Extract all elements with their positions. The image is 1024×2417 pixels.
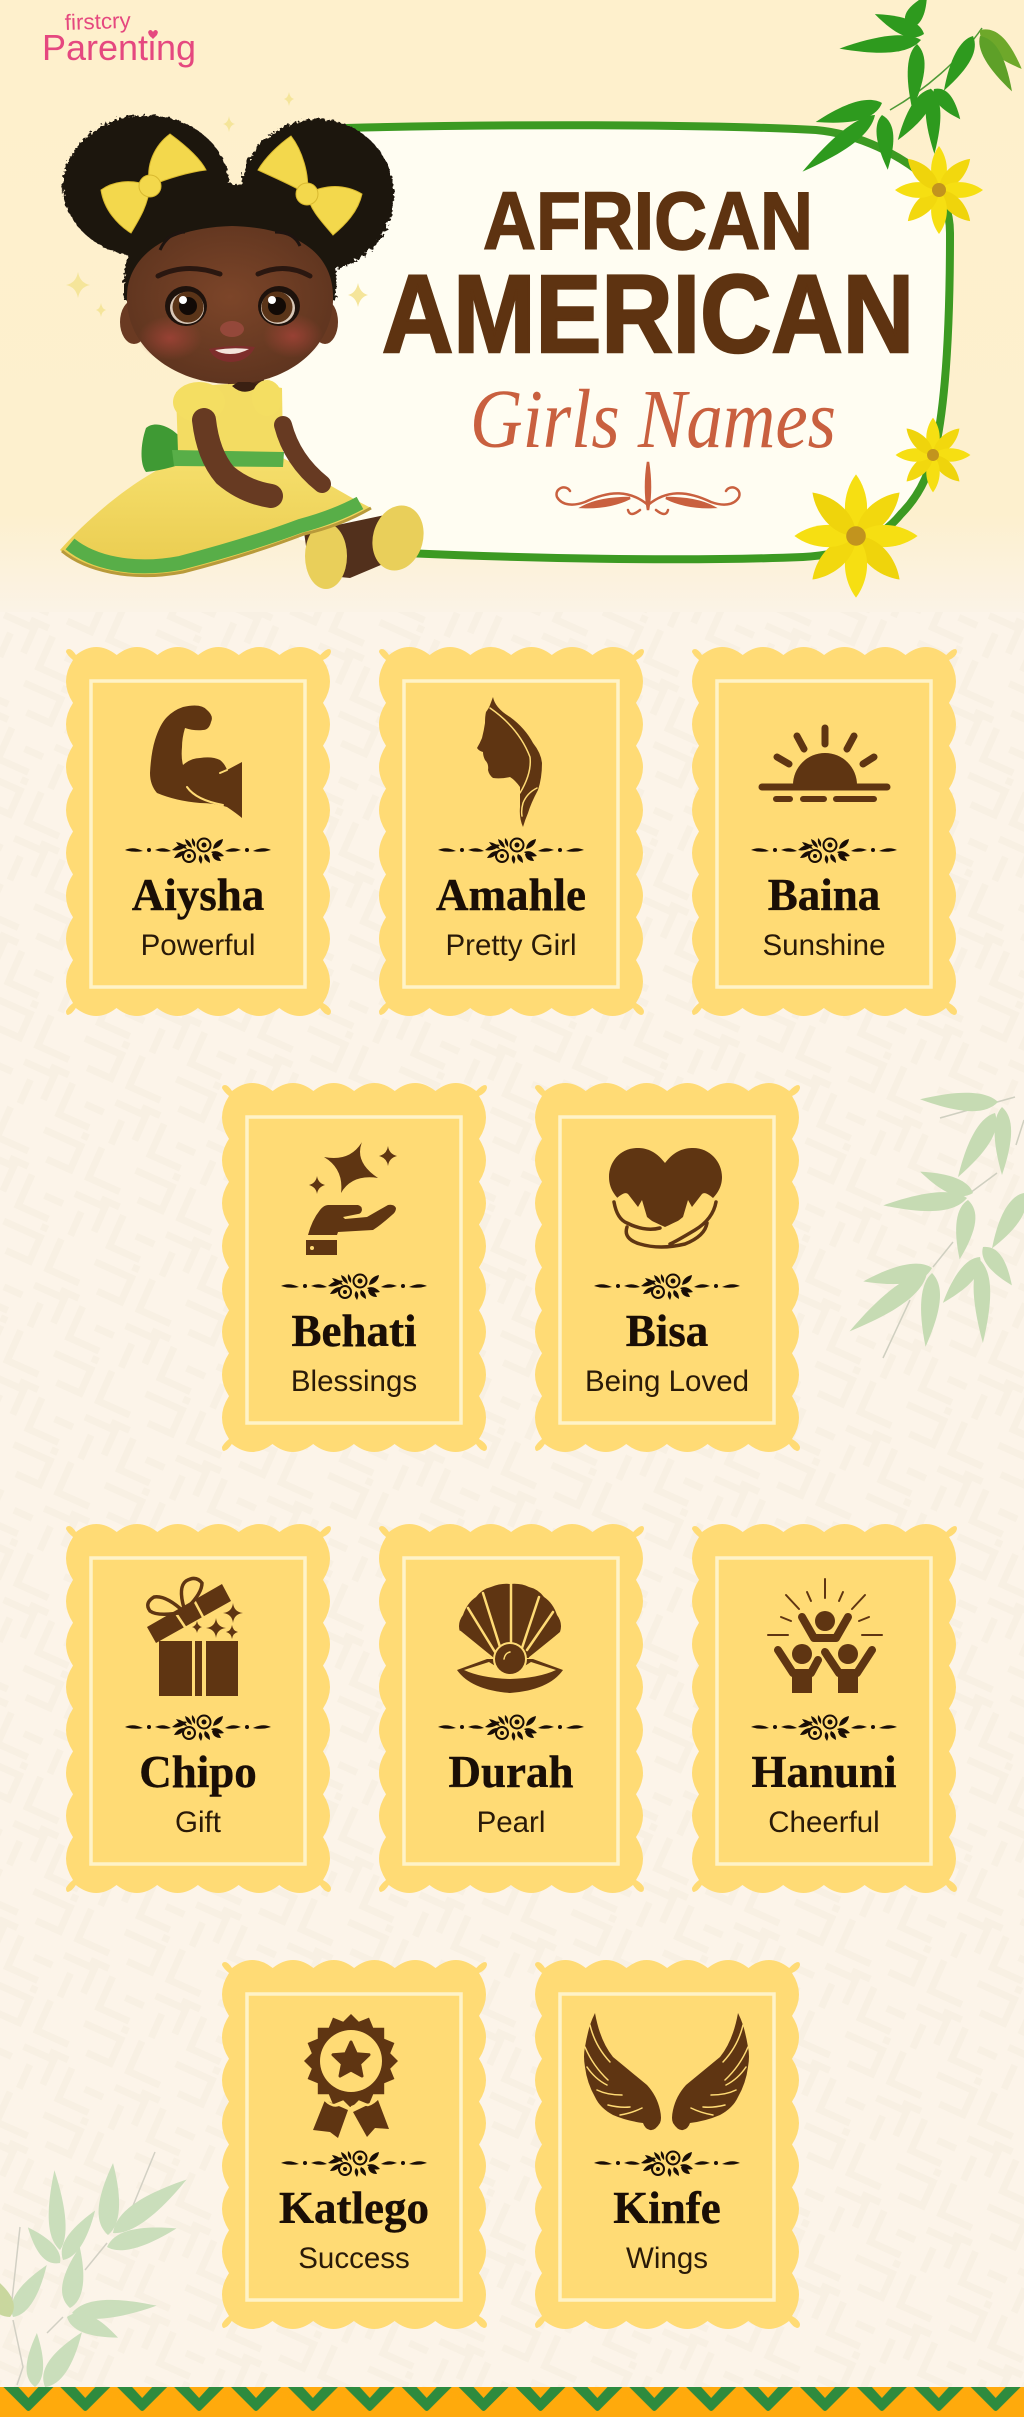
hair puffs: [63, 115, 394, 300]
name: Chipo: [139, 1747, 257, 1797]
name: Katlego: [279, 2183, 429, 2233]
title: Girls Names: Girls Names: [470, 373, 836, 466]
ornament: [281, 1274, 427, 1300]
title: African: AFRICAN: [483, 176, 813, 267]
ornament: [125, 1715, 271, 1741]
meaning: Sunshine: [762, 929, 886, 962]
eyes: [165, 286, 300, 326]
name: Aiysha: [132, 870, 264, 920]
icon: gift box: [147, 1578, 243, 1696]
shoes: [305, 500, 431, 589]
skirt: [60, 458, 371, 576]
skirt trim: [62, 508, 371, 576]
ornament: [751, 838, 897, 864]
bodice: [176, 384, 283, 452]
title frame: [270, 125, 950, 559]
icon: hugged heart: [609, 1148, 722, 1247]
icon: hand with sparkles: [306, 1142, 397, 1255]
bamboo: top right: [798, 0, 1024, 179]
ornament: [594, 2151, 740, 2177]
logo: [42, 8, 196, 68]
meaning: Wings: [626, 2242, 708, 2275]
bows: [101, 134, 362, 235]
card: Baina: [692, 647, 957, 1016]
card: Katlego: [222, 1960, 487, 2329]
sparkles: [66, 92, 368, 317]
flower: middle right: [896, 418, 970, 492]
name: Behati: [291, 1306, 417, 1356]
illustration: girl: [60, 92, 431, 589]
face: [127, 226, 333, 384]
eyebrows: [158, 268, 310, 276]
card: Bisa: [535, 1083, 800, 1452]
neck: [228, 376, 264, 394]
card: Chipo: [66, 1524, 331, 1893]
ornament: [594, 1274, 740, 1300]
ornament: [438, 838, 584, 864]
nose: [220, 321, 244, 337]
flower: bottom right: [794, 474, 918, 598]
ornament: [125, 838, 271, 864]
meaning: Pretty Girl: [445, 929, 577, 962]
ornament: [281, 2151, 427, 2177]
card: Kinfe: [535, 1960, 800, 2329]
icon: shell and pearl: [457, 1583, 563, 1693]
name: Amahle: [436, 870, 586, 920]
sash: [172, 450, 284, 467]
ornament: [751, 1715, 897, 1741]
sleeves: [173, 382, 225, 422]
icon: cheering people: [768, 1579, 882, 1693]
mouth: [209, 346, 255, 362]
title: American: AMERICAN: [382, 253, 914, 376]
logo: firstcry: [64, 8, 131, 35]
name: Durah: [448, 1747, 574, 1797]
legs: [304, 515, 388, 578]
card: Behati: [222, 1083, 487, 1452]
meaning: Blessings: [291, 1365, 417, 1398]
logo: Parenting: [42, 27, 196, 68]
title ornament: [557, 462, 739, 514]
icon: award rosette: [304, 2014, 398, 2138]
icon: sunrise: [762, 728, 887, 799]
icon: wings: [584, 2013, 749, 2130]
meaning: Gift: [175, 1806, 221, 1839]
name: Baina: [768, 870, 880, 920]
meaning: Powerful: [141, 929, 255, 962]
icon: flexed arm: [150, 706, 242, 818]
card: Durah: [379, 1524, 644, 1893]
ornament: [438, 1715, 584, 1741]
name: Bisa: [626, 1306, 708, 1356]
arms: [204, 420, 271, 496]
meaning: Being Loved: [585, 1365, 749, 1398]
bamboo: right, pale: [845, 1091, 1024, 1358]
meaning: Success: [298, 2242, 410, 2275]
name: Kinfe: [613, 2183, 721, 2233]
skirt green hem: [70, 503, 360, 566]
bottom band: [0, 2387, 1024, 2417]
name: Hanuni: [751, 1747, 897, 1797]
meaning: Pearl: [477, 1806, 545, 1839]
meaning: Cheerful: [768, 1806, 880, 1839]
flower: top right: [895, 146, 983, 234]
ears: [120, 300, 148, 344]
icon: woman profile: [477, 697, 542, 827]
green bow: [142, 424, 192, 472]
card: Amahle: [379, 647, 644, 1016]
card: Aiysha: [66, 647, 331, 1016]
bamboo: bottom left, pale: [0, 2152, 192, 2392]
card: Hanuni: [692, 1524, 957, 1893]
